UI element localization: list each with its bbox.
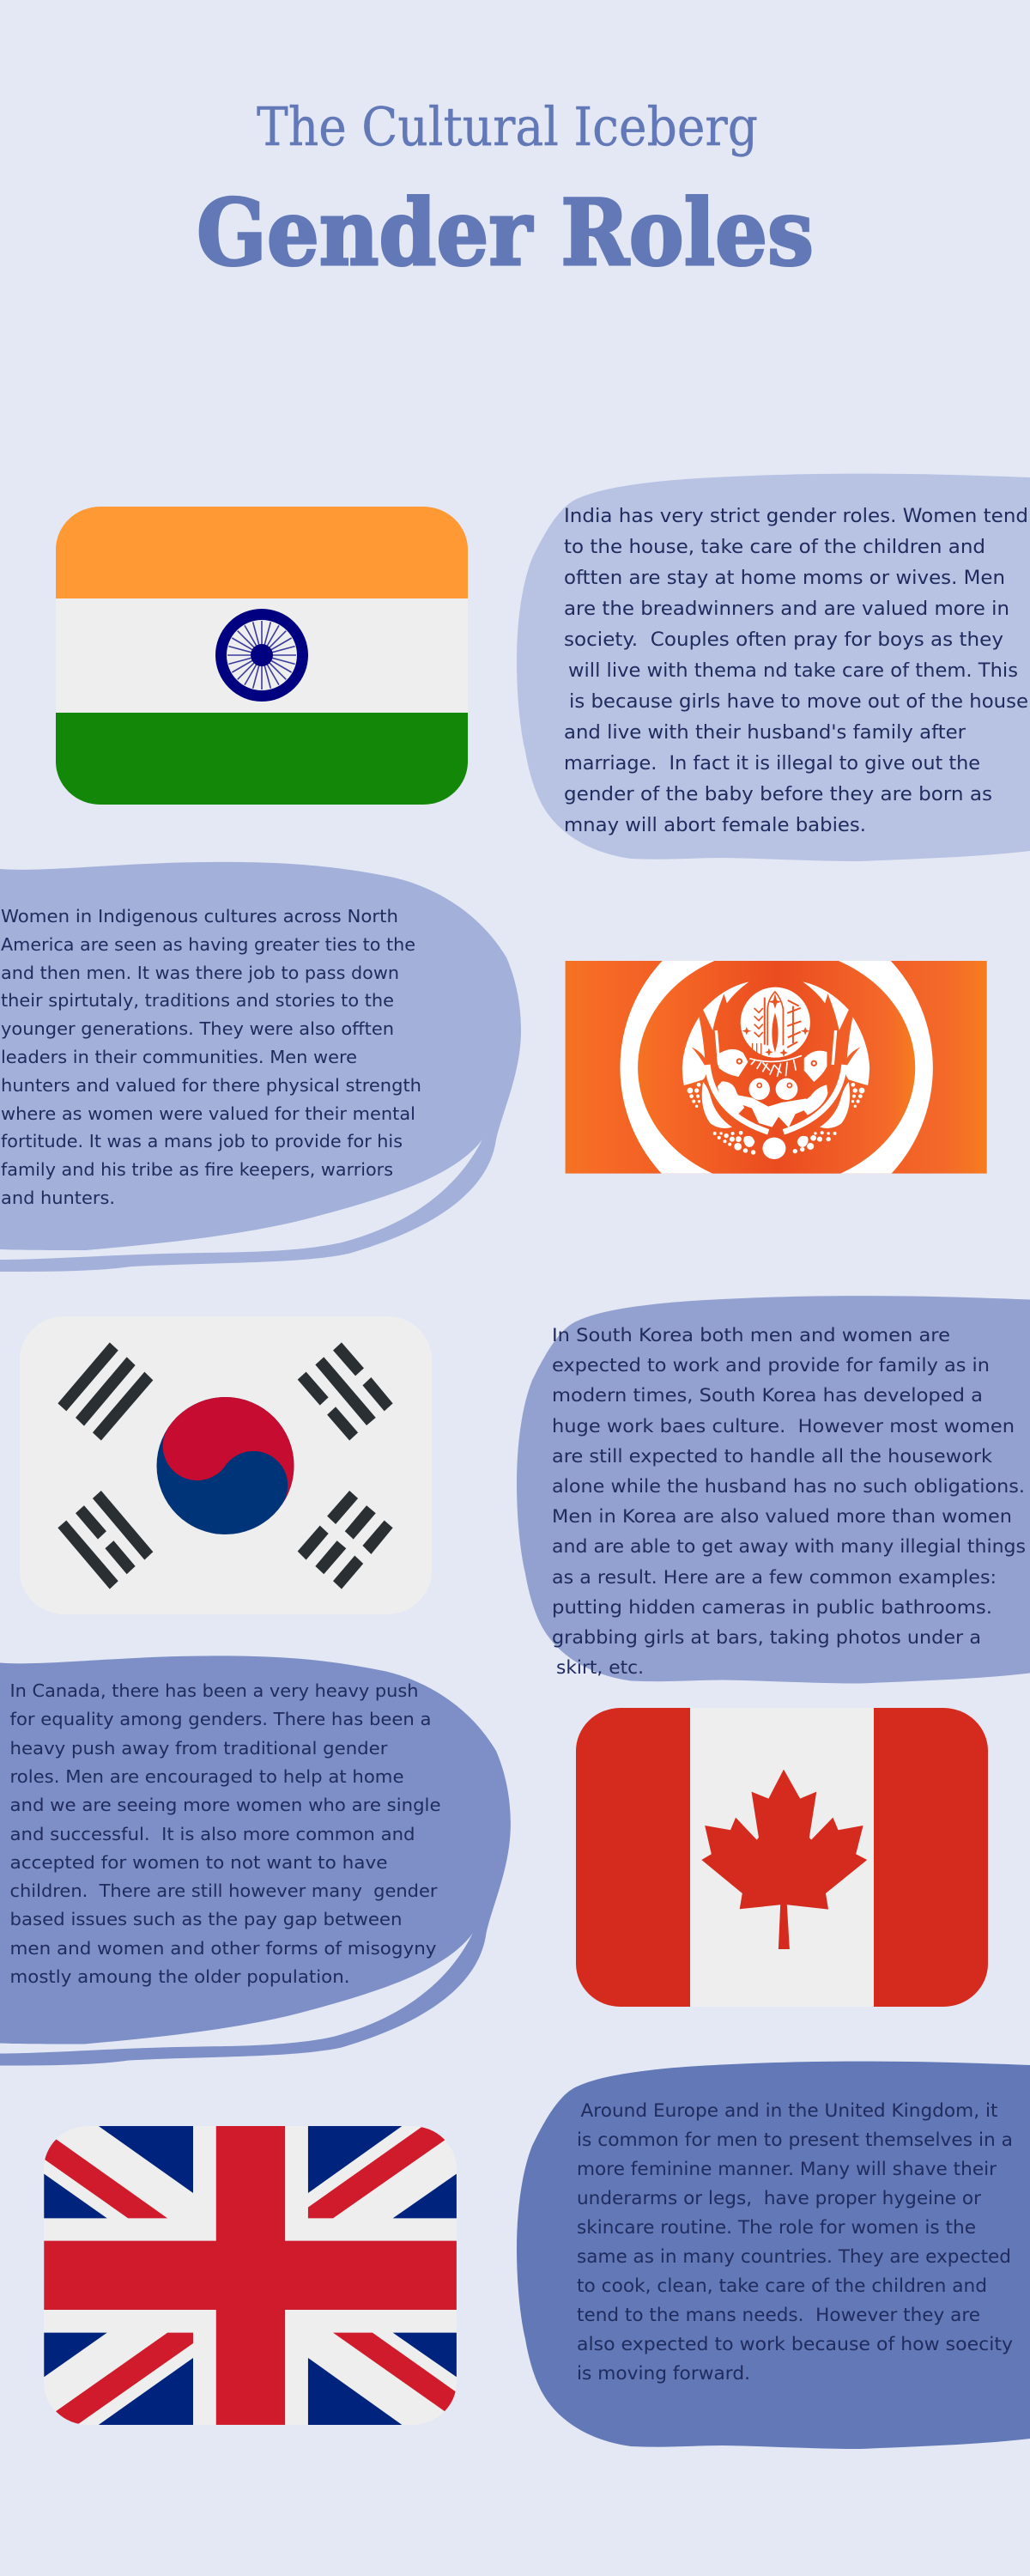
text block: canada: men and women and other forms of misogyny: [10, 1938, 436, 1959]
text block: indigenous: hunters and valued for there physical strength: [1, 1075, 421, 1096]
emblem: moon: [741, 987, 810, 1058]
text block: indigenous: and hunters.: [1, 1188, 115, 1208]
text block: india: marriage. In fact it is illegal to give out the: [564, 753, 980, 775]
text block: indigenous: leaders in their communities. Men were: [1, 1047, 357, 1067]
text block: indigenous: family and his tribe as fire keepers, warriors: [1, 1159, 393, 1180]
text block: south korea: expected to work and provide for family as in: [552, 1355, 990, 1376]
text block: south korea: In South Korea both men and women are: [552, 1325, 950, 1346]
text block: india: mnay will abort female babies.: [564, 815, 866, 836]
panel: indigenous cultures: [0, 862, 987, 1272]
text block: india: and live with their husband's family after: [564, 722, 966, 744]
panel: canada: [0, 1656, 988, 2066]
text block: south korea: are still expected to handle all the housework: [552, 1446, 993, 1467]
text block: south korea: alone while the husband has no such obligations.: [552, 1476, 1025, 1498]
panel: india: [56, 474, 1030, 861]
text block: india: oftten are stay at home moms or wives. Men: [564, 568, 1005, 589]
text block: india: gender of the baby before they are born as: [564, 784, 992, 805]
emblem: left half: [682, 981, 768, 1155]
text block: india: will live with thema nd take care of them. This: [568, 660, 1018, 682]
text block: indigenous: where as women were valued for their mental: [1, 1103, 415, 1124]
text block: united kingdom: is common for men to present themselves in a: [577, 2129, 1013, 2151]
emblem: nut at base: [762, 1138, 785, 1159]
text block: united kingdom: more feminine manner. Many will shave their: [577, 2159, 997, 2180]
text block: indigenous: [1, 906, 421, 1208]
text blob: south korea: [517, 1296, 1030, 1683]
text block: united kingdom: skincare routine. The role for women is the: [577, 2217, 976, 2239]
text block: south korea: skirt, etc.: [556, 1657, 644, 1679]
text block: india: society. Couples often pray for boys as they: [564, 629, 1003, 651]
text block: canada: children. There are still however many gender: [10, 1880, 438, 1901]
icon: canada flag: [576, 1708, 988, 2007]
text block: india: to the house, take care of the children and: [564, 537, 985, 558]
text block: india: is because girls have to move out of the house: [569, 691, 1028, 713]
text block: united kingdom: same as in many countries. They are expected: [577, 2246, 1011, 2268]
text block: south korea: Men in Korea are also valued more than women: [552, 1506, 1012, 1528]
text block: india: India has very strict gender roles. Women tend: [564, 506, 1028, 527]
text block: india: are the breadwinners and are valued more in: [564, 598, 1009, 620]
flag: taegeuk: [156, 1397, 294, 1534]
text block: united kingdom: to cook, clean, take care of the children and: [577, 2275, 987, 2297]
title: [197, 95, 814, 286]
text blob: united kingdom: [517, 2062, 1030, 2449]
panel: south korea: [20, 1296, 1030, 1683]
text block: canada: heavy push away from traditional gender: [10, 1738, 388, 1759]
heading: the cultural iceberg: The Cultural Iceberg: [257, 95, 758, 158]
text block: indigenous: and then men. It was there job to pass down: [1, 963, 399, 983]
text block: united kingdom: also expected to work because of how soecity: [577, 2334, 1013, 2355]
text blob: canada: [0, 1656, 511, 2066]
flag: trigrams: [58, 1342, 393, 1589]
text block: united kingdom: Around Europe and in the United Kingdom, it: [580, 2100, 997, 2122]
text block: south korea: as a result. Here are a few common examples:: [552, 1567, 997, 1589]
text block: canada: [10, 1680, 441, 1987]
text block: canada: accepted for women to not want to have: [10, 1852, 388, 1873]
text block: canada: mostly amoung the older population.: [10, 1966, 350, 1987]
icon: south korea flag: [20, 1316, 432, 1614]
icon: united kingdom flag: [44, 2126, 457, 2425]
icon: indigenous emblem: [565, 961, 987, 1174]
text block: canada: for equality among genders. There has been a: [10, 1709, 432, 1729]
flag: maple leaf: [701, 1770, 867, 1949]
emblem: right half: [784, 981, 869, 1153]
emblem: children: [737, 1078, 810, 1127]
text block: canada: and we are seeing more women who are single: [10, 1795, 441, 1815]
text block: india: [564, 506, 1028, 836]
text block: south korea: huge work baes culture. However most women: [552, 1416, 1015, 1437]
text block: indigenous: fortitude. It was a mans job to provide for his: [1, 1131, 403, 1151]
text blob: india: [517, 474, 1030, 861]
text block: united kingdom: tend to the mans needs. However they are: [577, 2305, 980, 2326]
text block: south korea: grabbing girls at bars, taking photos under a: [552, 1627, 981, 1649]
text block: south korea: putting hidden cameras in public bathrooms.: [552, 1597, 992, 1619]
emblem: cedar branch: [749, 1055, 802, 1077]
icon: india flag: [56, 507, 468, 805]
text block: indigenous: America are seen as having greater ties to the: [1, 934, 415, 955]
text block: canada: roles. Men are encouraged to help at home: [10, 1766, 403, 1787]
text block: indigenous: their spirtutaly, traditions and stories to the: [1, 990, 394, 1011]
text block: united kingdom: [577, 2100, 1013, 2385]
text block: canada: and successful. It is also more common and: [10, 1824, 415, 1844]
text block: south korea: and are able to get away with many illegial things: [552, 1536, 1026, 1558]
text block: south korea: modern times, South Korea has developed a: [552, 1385, 983, 1406]
heading: gender roles: Gender Roles: [197, 179, 814, 286]
text block: indigenous: younger generations. They were also offten: [1, 1018, 394, 1039]
text blob: indigenous: [0, 862, 521, 1272]
text block: canada: In Canada, there has been a very heavy push: [10, 1680, 418, 1701]
text block: indigenous: Women in Indigenous cultures across North: [1, 906, 398, 927]
text block: canada: based issues such as the pay gap between: [10, 1909, 402, 1929]
text block: united kingdom: underarms or legs, have proper hygeine or: [577, 2188, 981, 2209]
text block: united kingdom: is moving forward.: [577, 2363, 750, 2385]
panel: united kingdom: [27, 2062, 1030, 2449]
text block: south korea: [552, 1325, 1026, 1679]
